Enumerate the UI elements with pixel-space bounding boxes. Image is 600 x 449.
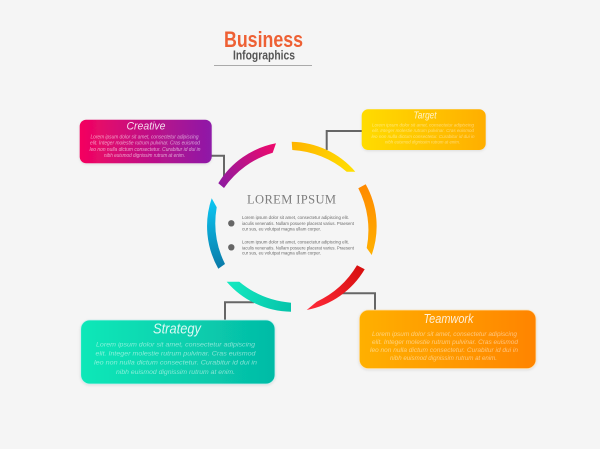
- bullet text 2: iaculis venenatis. Nullam posuere placerat varius. Praesent: [242, 245, 355, 251]
- heading: target: Target: [414, 110, 437, 122]
- segment: red: [307, 265, 365, 310]
- body: creative: leo non nulla dictum consectetur. Curabitur id dui in: [90, 147, 201, 153]
- panel: creative: [80, 120, 212, 163]
- heading: teamwork: Teamwork: [424, 311, 475, 326]
- bullet text 2: [228, 239, 355, 257]
- heading: strategy: Strategy: [153, 322, 202, 338]
- body: teamwork: Lorem ipsum dolor sit amet, consectetur adipiscing: [372, 331, 517, 338]
- title: [224, 27, 303, 62]
- body: creative: nibh euismod dignissim rutrum at enim.: [104, 153, 185, 159]
- body: target: nibh euismod dignissim rutrum at enim.: [385, 140, 460, 146]
- panel: target: [362, 109, 486, 150]
- bullet text 1: Lorem ipsum dolor sit amet, consectetur adipiscing elit.: [242, 215, 349, 221]
- body: strategy: [94, 342, 257, 376]
- bullet text 2: Lorem ipsum dolor sit amet, consectetur adipiscing elit.: [242, 239, 349, 245]
- bullet text 2: cur sus, eu volutpat magna ullam corper.: [242, 251, 321, 257]
- body: teamwork: leo non nulla dictum consectetur. Curabitur id dui in: [370, 347, 518, 354]
- title: Infographics: [233, 48, 295, 62]
- body: strategy: elit. Integer molestie rutrum pulvinar. Cras euismod: [96, 351, 256, 358]
- bullet text 1: cur sus, eu volutpat magna ullam corper.: [242, 226, 321, 232]
- connector: strategy: [225, 302, 254, 321]
- panel: teamwork: [359, 310, 536, 369]
- segment: teal: [227, 282, 291, 312]
- body: strategy: Lorem ipsum dolor sit amet, consectetur adipiscing: [96, 342, 255, 349]
- ring segments: [207, 142, 377, 312]
- segment: blue: [207, 198, 225, 269]
- heading: creative: Creative: [126, 120, 166, 132]
- body: creative: [90, 134, 201, 159]
- bullet text 1: iaculis venenatis. Nullam posuere placerat varius. Praesent: [242, 221, 355, 227]
- centre heading: LOREM IPSUM: [247, 192, 336, 206]
- connector: target: [327, 131, 363, 150]
- body: target: Lorem ipsum dolor sit amet, consectetur adipiscing: [372, 123, 474, 129]
- body: creative: Lorem ipsum dolor sit amet, consectetur adipiscing: [90, 134, 199, 140]
- segment: magenta: [218, 143, 276, 188]
- connector: creative: [211, 156, 224, 176]
- segment: yellow: [292, 142, 355, 172]
- connector: teamwork: [341, 293, 375, 311]
- body: target: [372, 123, 475, 146]
- body: teamwork: elit. Integer molestie rutrum pulvinar. Cras euismod: [372, 339, 518, 346]
- body: strategy: nibh euismod dignissim rutrum at enim.: [116, 369, 235, 376]
- segment: orange: [358, 184, 377, 255]
- bullet text 1: [228, 215, 355, 232]
- body: target: elit. Integer molestie rutrum pulvinar. Cras euismod: [372, 128, 474, 134]
- body: teamwork: nibh euismod dignissim rutrum at enim.: [390, 355, 497, 362]
- body: strategy: leo non nulla dictum consectetur. Curabitur id dui in: [94, 360, 257, 367]
- body: target: leo non nulla dictum consectetur. Curabitur id dui in: [372, 134, 475, 140]
- body: teamwork: [370, 331, 518, 362]
- body: creative: elit. Integer molestie rutrum pulvinar. Cras euismod: [90, 141, 200, 147]
- panel: strategy: [81, 320, 275, 384]
- title: Business: [224, 27, 303, 52]
